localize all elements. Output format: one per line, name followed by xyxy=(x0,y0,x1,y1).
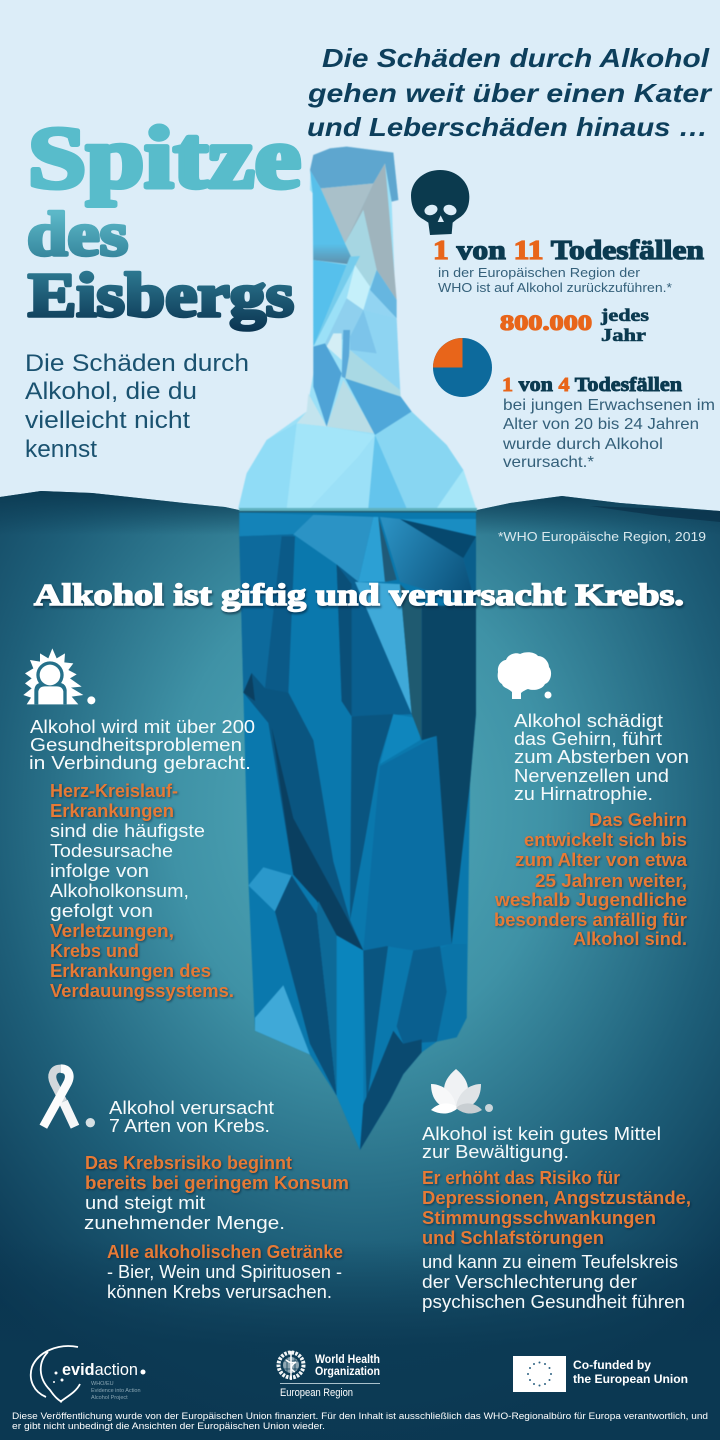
text block: 200 health problems: gefolgt von xyxy=(50,901,153,921)
footer disclaimer: Diese Veröffentlichung wurde von der Europäischen Union finanziert. Für den Inhalt ist ausschließlich das WHO-Regionalbüro für Europa verantwortlich, und xyxy=(12,1411,708,1422)
chart: pie 1 of 4 xyxy=(433,338,492,397)
logo: evidaction: WHO/EU xyxy=(91,1381,114,1387)
icon: person with rays xyxy=(23,648,95,704)
subtitle: kennst xyxy=(25,436,97,463)
text block: 200 health problems: sind die häufigste xyxy=(50,821,205,841)
text block: coping: und kann zu einem Teufelskreis xyxy=(422,1252,678,1272)
footer disclaimer xyxy=(12,1411,708,1432)
text block: coping xyxy=(422,1124,691,1312)
logo: evidaction: evidaction xyxy=(62,1360,138,1379)
text block: 200 health problems: Verletzungen, xyxy=(50,921,174,941)
text block: cancer: 7 Arten von Krebs. xyxy=(109,1116,270,1136)
heading: top statement: Die Schäden durch Alkohol xyxy=(322,43,710,73)
text block: brain damage: das Gehirn, führt xyxy=(514,729,662,749)
stat: 1 von 4: 1 von 4 Todesfällen xyxy=(502,374,682,396)
text block: brain damage: 25 Jahren weiter, xyxy=(535,871,687,891)
source note: *WHO Europäische Region, 2019 xyxy=(498,530,706,544)
heading: top statement: und Leberschäden hinaus … xyxy=(307,112,708,142)
stat: 800.000 jedes Jahr: jedes xyxy=(600,305,649,325)
logo: WHO: World Health xyxy=(315,1354,380,1366)
text block: coping: Er erhöht das Risiko für xyxy=(422,1168,620,1188)
icon: brain xyxy=(498,652,552,699)
icon: skull xyxy=(411,170,469,235)
text block: cancer: Alle alkoholischen Getränke xyxy=(107,1242,343,1262)
stat: 1 von 4: bei jungen Erwachsenen im xyxy=(503,397,715,414)
icon: awareness ribbon xyxy=(43,1069,95,1127)
text block: brain damage: entwickelt sich bis xyxy=(524,830,687,850)
logo: EU co-funded: the European Union xyxy=(573,1372,688,1386)
logo: WHO: Organization xyxy=(315,1366,380,1378)
text block: coping: Depressionen, Angstzustände, xyxy=(422,1188,691,1208)
subtitle xyxy=(25,350,249,463)
iceberg below water xyxy=(239,513,476,1150)
text block: cancer: Das Krebsrisiko beginnt xyxy=(85,1153,292,1173)
stat: 1 von 11 xyxy=(433,235,704,295)
text block: brain damage: Das Gehirn xyxy=(589,810,687,830)
stat: 1 von 11: 1 von 11 Todesfällen xyxy=(433,235,704,265)
text block: coping: Stimmungsschwankungen xyxy=(422,1208,656,1228)
text block: 200 health problems: in Verbindung gebracht. xyxy=(29,753,251,773)
title: Spitze des Eisbergs: Eisbergs xyxy=(28,262,294,330)
text block: cancer: zunehmender Menge. xyxy=(84,1213,285,1233)
text block: 200 health problems: Alkoholkonsum, xyxy=(50,881,189,901)
text block: 200 health problems: infolge von xyxy=(50,861,149,881)
text block: coping: und Schlafstörungen xyxy=(422,1228,604,1248)
logo: evidaction: Evidence into Action xyxy=(91,1388,141,1394)
text block: brain damage: Alkohol sind. xyxy=(573,929,687,949)
text block: brain damage xyxy=(494,711,689,949)
logo: WHO: European Region xyxy=(280,1387,353,1399)
text block: coping: der Verschlechterung der xyxy=(422,1272,637,1292)
text block: brain damage: zum Absterben von xyxy=(514,747,689,767)
subtitle: Die Schäden durch xyxy=(25,350,249,377)
sea background xyxy=(0,491,720,1440)
headline: Alkohol ist giftig: Alkohol ist giftig und verursacht Krebs. xyxy=(34,577,684,612)
text block: coping: Alkohol ist kein gutes Mittel xyxy=(422,1124,661,1144)
stat: 1 von 4: verursacht.* xyxy=(503,454,594,471)
title: Spitze des Eisbergs: des xyxy=(27,201,128,269)
bottle above water xyxy=(238,147,477,511)
text block: 200 health problems: Herz-Kreislauf- xyxy=(50,781,178,801)
title: Spitze des Eisbergs xyxy=(27,110,301,330)
text block: brain damage: Alkohol schädigt xyxy=(514,711,663,731)
text block: cancer: bereits bei geringem Konsum xyxy=(85,1173,349,1193)
stat: 1 von 4: wurde durch Alkohol xyxy=(502,436,663,453)
logo: EU co-funded: Co-funded by xyxy=(573,1358,651,1372)
stat: 1 von 4: Alter von 20 bis 24 Jahren xyxy=(503,416,699,433)
text block: brain damage: Nervenzellen und xyxy=(514,766,669,786)
text block: brain damage: zu Hirnatrophie. xyxy=(514,784,653,804)
logo: WHO xyxy=(278,1351,380,1399)
stat: 1 von 11: WHO ist auf Alkohol zurückzuführen.* xyxy=(438,280,672,295)
text block: cancer: - Bier, Wein und Spirituosen - xyxy=(107,1262,342,1282)
stat: 800.000 jedes Jahr xyxy=(500,305,649,345)
text block: cancer: und steigt mit xyxy=(85,1193,205,1213)
text block: brain damage: weshalb Jugendliche xyxy=(494,890,687,910)
text block: 200 health problems: Verdauungssystems. xyxy=(50,981,234,1001)
title: Spitze des Eisbergs: Spitze xyxy=(28,110,301,207)
heading: top statement: gehen weit über einen Kater xyxy=(307,78,713,108)
icon: lotus xyxy=(431,1069,493,1114)
text block: 200 health problems: Erkrankungen xyxy=(50,801,174,821)
text block: 200 health problems: Gesundheitsproblemen xyxy=(30,735,242,755)
text block: cancer: können Krebs verursachen. xyxy=(107,1282,332,1302)
text block: cancer xyxy=(84,1098,349,1302)
subtitle: vielleicht nicht xyxy=(25,407,190,434)
text block: 200 health problems xyxy=(29,717,255,1001)
footer disclaimer: er gibt nicht unbedingt die Ansichten der Europäischen Union wieder. xyxy=(12,1421,325,1432)
text block: 200 health problems: Alkohol wird mit über 200 xyxy=(30,717,255,737)
heading: top statement xyxy=(307,43,713,142)
subtitle: Alkohol, die du xyxy=(25,378,197,405)
text block: coping: psychischen Gesundheit führen xyxy=(422,1292,685,1312)
text block: cancer: Alkohol verursacht xyxy=(109,1098,274,1118)
text block: brain damage: zum Alter von etwa xyxy=(515,850,688,870)
logo: evidaction: Alcohol Project xyxy=(91,1395,128,1401)
stat: 1 von 4 xyxy=(502,374,715,471)
text block: 200 health problems: Krebs und xyxy=(50,941,139,961)
stat: 800.000 jedes Jahr: Jahr xyxy=(601,325,646,345)
logo: EU co-funded xyxy=(513,1356,688,1392)
text block: brain damage: besonders anfällig für xyxy=(494,910,687,930)
stat: 800.000 jedes Jahr: 800.000 xyxy=(500,310,592,335)
stat: 1 von 11: in der Europäischen Region der xyxy=(438,265,641,280)
logo: evidaction xyxy=(31,1346,145,1402)
text block: coping: zur Bewältigung. xyxy=(422,1142,569,1162)
text block: 200 health problems: Erkrankungen des xyxy=(50,961,211,981)
text block: 200 health problems: Todesursache xyxy=(50,841,173,861)
